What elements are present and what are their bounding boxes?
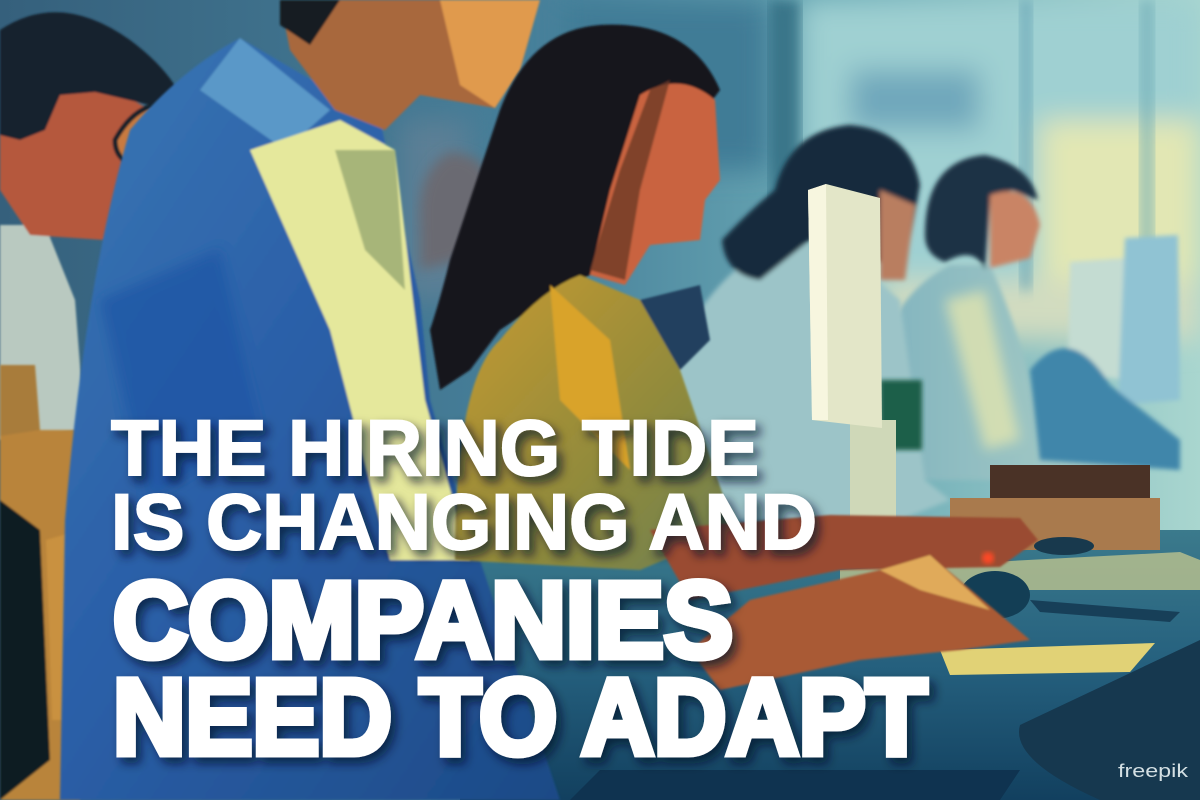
chair at left	[0, 365, 80, 800]
white computer monitor	[808, 184, 922, 520]
man in blue shirt	[60, 0, 560, 800]
title line 2: IS CHANGING AND	[111, 477, 817, 566]
middle woman in white	[665, 125, 950, 520]
desk and keyboards	[460, 465, 1200, 800]
far left man with glasses	[0, 12, 188, 440]
far background woman in white	[880, 155, 1140, 480]
title line 4: NEED TO ADAPT	[113, 656, 927, 777]
image credit: freepik	[1118, 761, 1189, 781]
title line 3: COMPANIES	[113, 559, 733, 680]
hands on keyboard	[650, 515, 1038, 690]
background monitors	[1030, 235, 1180, 470]
title line 1: THE HIRING TIDE	[111, 403, 759, 492]
central woman	[430, 25, 735, 570]
